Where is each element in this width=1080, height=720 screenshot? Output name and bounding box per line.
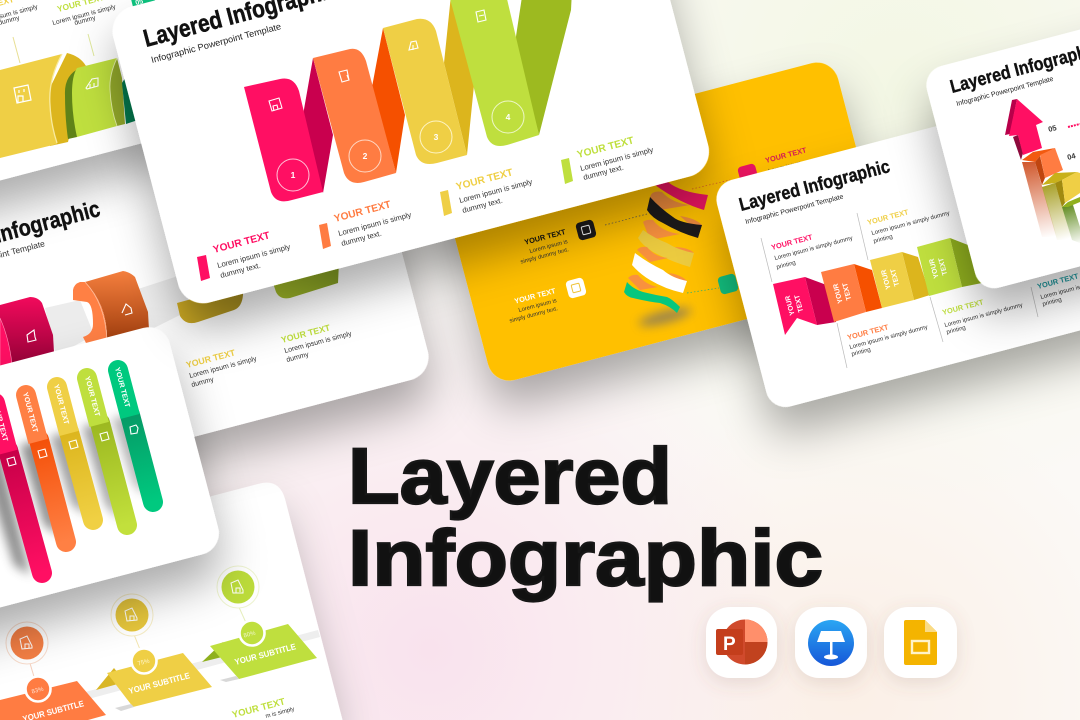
- title: Layered: [348, 431, 672, 520]
- panel: yellow spiral slide: [435, 58, 891, 385]
- callout: pink icon text: YOUR TEXT: [764, 145, 808, 165]
- chart: folded ribbon: 1: [291, 170, 296, 180]
- subheading: Infographic Powerpoint Template: [745, 194, 844, 226]
- text: lime note: printing: [946, 325, 967, 336]
- subheading: Infographic Powerpoint Template: [150, 21, 282, 65]
- legend: orange: dummy text.: [340, 229, 383, 248]
- icon: google slides: [884, 607, 957, 678]
- badge: 05: [130, 0, 155, 7]
- chart: tents and percentages: 80%: [243, 630, 257, 639]
- legend: orange: [319, 199, 412, 249]
- legend: lime: dummy text.: [582, 163, 625, 182]
- legend: orange: YOUR TEXT: [333, 199, 393, 225]
- text: captions: dummy: [74, 14, 97, 27]
- legend: yellow: YOUR TEXT: [455, 167, 515, 193]
- chart: folded banner: YOUR: [833, 283, 845, 304]
- text: yellow note: YOUR TEXT: [866, 207, 910, 227]
- chart: folded banner: TEXT: [890, 267, 901, 287]
- legend: pink: [197, 230, 291, 281]
- title: [348, 431, 823, 602]
- text: pink note: YOUR TEXT: [770, 232, 814, 252]
- callout lines: [605, 180, 730, 293]
- text: captions: Lorem ipsum is simply: [52, 3, 117, 27]
- chart: tents and percentages: 75%: [137, 658, 151, 667]
- chart: folded banner: TEXT: [794, 293, 805, 313]
- icon: keynote: [795, 607, 867, 678]
- callout: white icon text: Lorem ipsum is: [518, 298, 558, 314]
- callout: pink icon text: [737, 145, 808, 185]
- heading: Layered Infographic: [737, 155, 892, 215]
- text: lime block: [280, 322, 353, 364]
- text: captions: [0, 0, 117, 27]
- text: lime block: dummy: [286, 351, 310, 364]
- callout: white icon text: [509, 277, 587, 325]
- title: Infographic: [348, 513, 823, 602]
- panel: rising arrow slide: [922, 0, 1080, 293]
- text: pink note: Lorem ipsum is simply dummy: [774, 236, 854, 262]
- text: pink note: printing: [776, 260, 797, 271]
- chart: folded banner: [773, 238, 982, 335]
- chart: cylinders: [0, 34, 138, 158]
- panel: ribbon cylinders slide top left: [0, 0, 170, 275]
- chart: folded banner: YOUR: [881, 269, 893, 290]
- chart: folded ribbon: 2: [363, 151, 368, 161]
- legend: pink: Lorem ipsum is simply: [216, 242, 291, 270]
- icon: green square: [717, 273, 739, 295]
- panel: stepped tents slide: [0, 483, 342, 720]
- text: orange note: Lorem ipsum is simply dummy: [849, 325, 929, 351]
- callout: black icon text: YOUR TEXT: [523, 227, 567, 247]
- legend: yellow: dummy text.: [461, 196, 504, 215]
- panel: cylinder slide: [0, 78, 434, 513]
- labels: 05 04: [1047, 123, 1080, 162]
- callout: white icon text: simply dummy text.: [509, 306, 559, 325]
- panel: layered ribbon slide: [712, 78, 1080, 411]
- panel: main ribbon slide: [107, 0, 715, 309]
- guide lines: [761, 213, 1038, 368]
- chart: tents and percentages: 83%: [31, 686, 45, 695]
- legend: yellow: [440, 167, 533, 216]
- legend: lime: [561, 135, 654, 184]
- callout: black icon text: simply dummy text.: [520, 247, 570, 266]
- chart: spiral ribbon: [624, 182, 708, 330]
- text: orange note: YOUR TEXT: [846, 322, 890, 342]
- text: yellow note: [866, 207, 951, 245]
- legend: pink: YOUR TEXT: [212, 230, 272, 256]
- legend: lime: YOUR TEXT: [576, 135, 636, 161]
- callout: black icon text: Lorem ipsum is: [529, 239, 569, 255]
- chart: layered bars: YOUR TEXT: [52, 383, 71, 426]
- text: yellow note: Lorem ipsum is simply dummy: [871, 211, 951, 237]
- subheading: Infographic Powerpoint Template: [956, 76, 1054, 108]
- chart: folded banner: YOUR: [785, 295, 797, 316]
- text: teal note: printing: [1042, 297, 1063, 308]
- text: yellow block: YOUR TEXT: [185, 347, 237, 370]
- callout: white icon text: YOUR TEXT: [513, 286, 557, 306]
- callout: black icon text: [520, 219, 597, 266]
- text: lime note: YOUR TEXT: [941, 297, 985, 317]
- chart: folded ribbon: 3: [434, 132, 439, 142]
- text: orange note: printing: [851, 347, 872, 358]
- chart: folded ribbon: 4: [506, 112, 511, 122]
- legend: orange: Lorem ipsum is simply: [337, 210, 412, 238]
- text: lime note: [941, 297, 1024, 336]
- chart: layered bars: YOUR TEXT: [83, 375, 102, 418]
- text: lime block: YOUR TEXT: [280, 322, 332, 345]
- text: yellow note: printing: [873, 234, 894, 245]
- callout: pink icon text: Lorem ipsum: [768, 161, 802, 175]
- legend: pink: dummy text.: [219, 261, 262, 280]
- labels: 05 04: 04: [1066, 151, 1077, 162]
- chart: layered bars: [0, 358, 153, 575]
- chart: folded ribbon: [244, 0, 572, 201]
- chart: tents and percentages: YOUR SUBTITLE: [128, 670, 191, 696]
- text: teal note: Lorem ipsum is: [1040, 285, 1080, 301]
- chart: folded banner: TEXT: [842, 281, 853, 301]
- text: teal note: YOUR TEXT: [1036, 271, 1080, 291]
- panel: colored bars slide: [0, 322, 224, 655]
- text: yellow block: [185, 347, 258, 389]
- text: yellow block: dummy: [191, 376, 215, 389]
- text: lime note: Lorem ipsum is simply dummy: [944, 303, 1024, 329]
- text: lime block: Lorem ipsum is simply: [284, 330, 353, 355]
- chart: folded banner: TEXT: [938, 256, 949, 276]
- text: teal note: [1036, 271, 1080, 308]
- legend: yellow: Lorem ipsum is simply: [458, 177, 533, 205]
- text: pink note: [770, 232, 854, 271]
- icon: powerpoint: [706, 607, 777, 678]
- chart: cylinder pieces: [0, 235, 345, 370]
- chart: layered bars: YOUR TEXT: [21, 391, 40, 434]
- chart: tents and percentages: [0, 566, 320, 720]
- chart: arrow and steps: [1005, 99, 1080, 243]
- labels: 05 04: 05: [1047, 123, 1058, 134]
- legend: lime: Lorem ipsum is simply: [579, 145, 654, 173]
- chart: layered bars: YOUR TEXT: [113, 366, 132, 409]
- chart: tents and percentages: YOUR SUBTITLE: [234, 641, 297, 667]
- chart: folded banner: YOUR: [929, 258, 941, 279]
- icon: powerpoint: P: [723, 634, 736, 655]
- text: lime block: m is simply: [265, 707, 295, 720]
- text: yellow block: Lorem ipsum is simply: [189, 355, 258, 380]
